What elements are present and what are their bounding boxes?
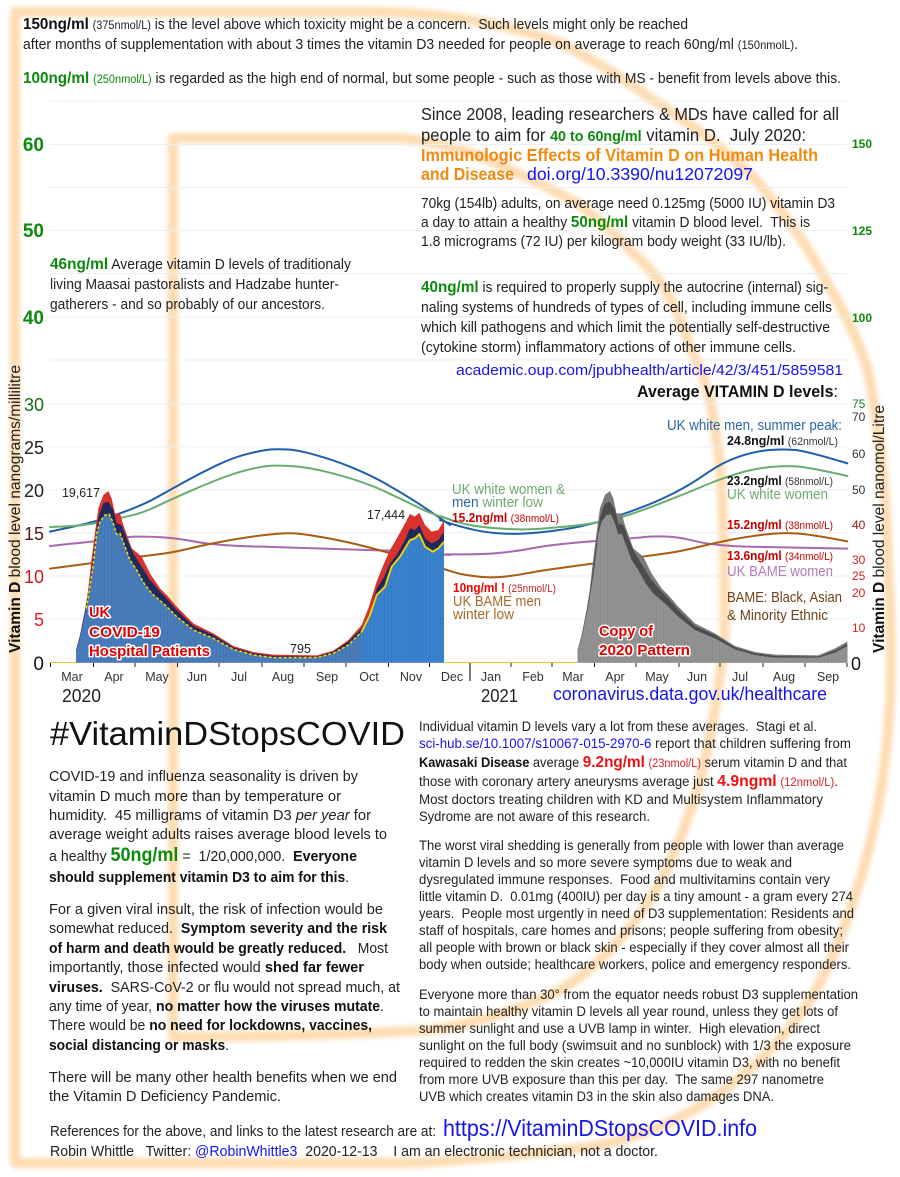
callout: 70kg adults dose: 70kg (154lb) adults, on average need 0.125mg (5000 IU) vitamin D3 [421, 196, 835, 212]
series labels: right side: 15.2ng/ml (38nmol/L) [727, 517, 833, 532]
chart label: Copy of 2020 Pattern [599, 623, 690, 659]
year label 2021: 2021 [481, 686, 518, 706]
footer: references and author [50, 1115, 757, 1160]
month labels: May [145, 670, 170, 684]
series labels: winter lows [452, 482, 565, 623]
callout: 2008 researchers: Since 2008, leading researchers & MDs have called for all [421, 104, 839, 124]
chart label: Copy of 2020 Pattern: Copy of [599, 623, 654, 640]
month labels: Dec [441, 670, 463, 684]
right axis labels: 0 [851, 654, 861, 674]
callout: 70kg adults dose: a day to attain a healthy 50ng/ml vitamin D blood level. This is [421, 214, 810, 231]
text: 150ng/ml line one: 150ng/ml (375nmol/L) is the level above which toxicity might be a concern. Such levels might only be reached [23, 16, 688, 33]
left axis labels: 25 [24, 438, 44, 458]
text block: left column: somewhat reduced. Symptom severity and the risk [49, 920, 388, 937]
month labels [61, 670, 839, 684]
callout: 2008 researchers: doi.org/10.3390/nu12072097 [527, 164, 753, 184]
chart label: UK COVID-19 Hospital Patients: COVID-19 [89, 624, 160, 641]
series labels: winter lows: men winter low [452, 495, 543, 511]
right axis labels: 70 [852, 410, 866, 424]
series labels: winter lows: UK white women & [452, 482, 565, 498]
callout: 40ng/ml autocrine signaling: academic.oup.com/jpubhealth/article/42/3/451/5859581 [456, 363, 843, 379]
right axis labels: 100 [852, 311, 872, 325]
series labels: right side: BAME: Black, Asian [727, 590, 842, 606]
chart label: UK COVID-19 Hospital Patients: Hospital Patients [89, 643, 210, 660]
left axis title: Vitamin D blood level nanograms/millilitre [7, 365, 24, 653]
peak and trough values: 795 [290, 641, 311, 656]
line: yellow edge, first wave [86, 514, 362, 658]
text block: left column: humidity. 45 milligrams of vitamin D3 per year for [49, 807, 371, 824]
callout: 40ng/ml autocrine signaling: (cytokine storm) inflammatory actions of other immune cells. [421, 340, 796, 356]
callout: 46ng/ml Maasai and Hadzabe: gatherers - and so probably of our ancestors. [50, 297, 325, 313]
left axis labels: 40 [23, 308, 44, 329]
curves 2020 [50, 449, 450, 570]
text block: left column: social distancing or masks. [49, 1037, 229, 1054]
month labels: Mar [562, 670, 584, 684]
callout: 46ng/ml Maasai and Hadzabe: living Maasai pastoralists and Hadzabe hunter- [50, 277, 339, 293]
series labels: winter lows: UK BAME men [453, 594, 541, 610]
text block: left column: a healthy 50ng/ml = 1/20,000,000. Everyone [49, 845, 357, 866]
callout: 70kg adults dose: 1.8 micrograms (72 IU) per kilogram body weight (33 IU/lb). [421, 234, 786, 250]
callout: 46ng/ml Maasai and Hadzabe: 46ng/ml Average vitamin D levels of traditionaly [50, 256, 352, 273]
band: light grey [578, 514, 847, 663]
curve: UK BAME men [50, 533, 447, 570]
text block: left column: should supplement vitamin D3 to aim for this. [49, 869, 349, 886]
right axis labels: 150 [852, 137, 872, 151]
callout: 40ng/ml autocrine signaling [420, 279, 843, 379]
text block: right column [419, 719, 858, 1104]
vitamin D level curves [50, 449, 847, 577]
text block: right column: staff of hospitals, care homes and prisons; people suffering from obesity; [419, 923, 843, 938]
callout: 46ng/ml Maasai and Hadzabe [50, 256, 352, 313]
source link: coronavirus.data.gov.uk/healthcare [553, 684, 827, 704]
footer: references and author: https://VitaminDStopsCOVID.info [443, 1115, 757, 1141]
band: outer grey [578, 491, 847, 663]
month labels: Apr [104, 670, 124, 684]
text block: left column: the Vitamin D Deficiency Pandemic. [49, 1088, 281, 1105]
left axis labels [23, 135, 44, 675]
text block: right column: UVB which creates vitamin D3 in the skin also damages DNA. [419, 1089, 774, 1104]
text block: right column: those with coronary artery aneurysms average just 4.9ngml (12nmol/L). [419, 773, 838, 790]
month labels: Sep [817, 670, 839, 684]
text block: right column: to maintain healthy vitamin D levels all year round, unless they get lots of [419, 1004, 838, 1019]
text: 150ng/ml line two: after months of supplementation with about 3 times the vitamin D3 needed for people on average to reach 60ng/ml (150nmolL). [23, 37, 798, 53]
right axis labels: 25 [852, 569, 866, 583]
text block: left column: For a given viral insult, the risk of infection would be [49, 901, 383, 918]
chart label: UK COVID-19 Hospital Patients: UK [89, 604, 110, 621]
callout: 40ng/ml autocrine signaling: naling systems of hundreds of types of cell, including immune cells [421, 300, 832, 316]
right axis title: Vitamin D blood level nanomol/Litre [871, 405, 888, 653]
text block: left column: importantly, those infected would shed far fewer [49, 959, 364, 976]
right axis labels: 10 [852, 621, 866, 635]
right axis labels: 20 [852, 586, 866, 600]
month labels: Mar [61, 670, 83, 684]
text block: right column: summer sunlight and use a UVB lamp in winter. High elevation, direct [419, 1021, 820, 1036]
text block: right column: Everyone more than 30° from the equator needs robust D3 supplementation [419, 987, 858, 1002]
month labels: Aug [272, 670, 294, 684]
text block: right column: years. People most urgently in need of D3 supplementation: Residents and [419, 906, 854, 921]
area chart: grey copy of 2020 pattern [578, 491, 847, 663]
x axis line and ticks [50, 662, 847, 681]
text block: right column: Most doctors treating children with KD and Multisystem Inflammatory [419, 792, 823, 807]
month labels: Sep [316, 670, 338, 684]
text block: right column: from more UVB exposure than this per day. The same 297 nanometre [419, 1072, 824, 1087]
chart gridlines [50, 101, 847, 619]
text block: right column: body when outside; healthcare workers, police and emergency responders. [419, 957, 851, 972]
series labels: right side: UK white men, summer peak: [667, 418, 842, 434]
month labels: May [645, 670, 670, 684]
series labels: right side: 24.8ng/ml (62nmol/L) [727, 433, 838, 448]
peak and trough values [62, 485, 405, 656]
band: dark grey [578, 502, 847, 663]
text: 100ng/ml line: 100ng/ml (250nmol/L) is regarded as the high end of normal, but some people - such as those with MS - benefit from levels above this. [23, 70, 841, 87]
callout: 40ng/ml autocrine signaling: 40ng/ml is required to properly supply the autocrine (internal) sig- [421, 279, 828, 296]
series labels: right side: 23.2ng/ml (58nmol/L) [727, 473, 833, 488]
chart label: UK COVID-19 Hospital Patients [89, 604, 210, 660]
month labels: Jul [732, 670, 748, 684]
series labels: winter lows: winter low [452, 607, 514, 623]
right axis labels: 75 [852, 397, 866, 411]
left axis labels: 15 [24, 524, 44, 544]
callout: 2008 researchers: Immunologic Effects of Vitamin D on Human Health [421, 145, 818, 165]
text block: left column: vitamin D much more than by temperature or [49, 788, 341, 805]
left axis labels: 30 [24, 395, 44, 415]
left axis labels: 10 [24, 567, 44, 587]
month labels: Jan [481, 670, 501, 684]
footer: references and author: Robin Whittle Twitter: @RobinWhittle3 2020-12-13 I am an electronic technician, not a doctor. [50, 1144, 658, 1160]
text block: right column: Individual vitamin D levels vary a lot from these averages. Stagi et al. [419, 719, 817, 734]
text block: right column: Sydrome are not aware of this research. [419, 809, 650, 824]
month labels: Jul [231, 670, 247, 684]
left axis labels: 50 [23, 221, 44, 242]
text block: left column: of harm and death would be greatly reduced. Most [49, 940, 389, 957]
footer: references and author: References for the above, and links to the latest research are at: [50, 1124, 436, 1140]
area chart: UK COVID-19 hospital patients 2020 [76, 491, 444, 663]
left axis labels: 0 [33, 654, 44, 675]
daily bar stripes [578, 514, 847, 663]
series labels: right side: & Minority Ethnic [727, 608, 828, 624]
main title: #VitaminDStopsCOVID [50, 715, 405, 752]
series labels: right side: UK BAME women [727, 564, 833, 580]
callout: 40ng/ml autocrine signaling: which kill pathogens and which limit the potentially self-destructive [420, 320, 830, 336]
year label 2020: 2020 [62, 686, 101, 706]
text block: right column: required to redden the skin creates ~10,000IU vitamin D3, with no benefit [419, 1055, 840, 1070]
series labels: right side [667, 418, 842, 624]
series labels: winter lows: 10ng/ml ! (25nmol/L) [453, 580, 556, 595]
right axis labels: 125 [852, 224, 872, 238]
text block: right column: little vitamin D. 0.01mg (400IU) per day is a tiny amount - a gram every 274 [419, 889, 854, 904]
top text: 150 and 100 ng/ml notes [23, 16, 841, 87]
month labels: Apr [605, 670, 625, 684]
series labels: right side: UK white women [727, 487, 828, 503]
band: in hospital (navy) [76, 502, 444, 663]
chart heading: Average VITAMIN D levels: Average VITAMIN D levels: [637, 382, 838, 401]
callout: 2008 researchers: people to aim for 40 to 60ng/ml vitamin D. July 2020: [421, 125, 806, 145]
callout: 2008 researchers [421, 104, 839, 184]
callout: 70kg adults dose [421, 196, 835, 250]
text block: right column: sci-hub.se/10.1007/s10067-015-2970-6 report that children suffering from [419, 736, 851, 751]
callout: 2008 researchers: and Disease [421, 164, 514, 184]
text block: right column: Kawasaki Disease average 9.2ng/ml (23nmol/L) serum vitamin D and that [419, 754, 847, 771]
series labels: right side: 13.6ng/ml (34nmol/L) [727, 548, 833, 563]
left axis labels: 60 [23, 135, 44, 156]
peak and trough values: 17,444 [367, 507, 405, 522]
text block: left column: There will be many other health benefits when we end [49, 1069, 397, 1086]
month labels: Jun [687, 670, 707, 684]
text block: left column: viruses. SARS-CoV-2 or flu would not spread much, at [49, 979, 401, 996]
text block: left column: There would be no need for lockdowns, vaccines, [49, 1017, 372, 1034]
text block: right column: The worst viral shedding is generally from people with lower than average [419, 838, 844, 853]
month labels: Jun [187, 670, 207, 684]
right axis labels: 40 [852, 518, 866, 532]
right axis labels: 60 [852, 447, 866, 461]
curves 2021 [440, 449, 847, 577]
band: ventilated (red) [76, 491, 444, 663]
curve: UK BAME women [50, 537, 450, 555]
text block: right column: dysregulated immune responses. Food and multivitamins contain very [419, 872, 830, 887]
line: yellow edge, second wave [362, 534, 444, 632]
right axis labels: 50 [852, 483, 866, 497]
peak and trough values: 19,617 [62, 485, 100, 500]
text block: right column: all people with brown or black skin - especially if they cover almost all their [419, 940, 850, 955]
text block: left column [49, 768, 401, 1105]
month labels: Oct [359, 670, 379, 684]
text block: right column: vitamin D levels and so more severe symptoms due to weak and [419, 855, 792, 870]
month labels: Nov [400, 670, 423, 684]
text block: left column: any time of year, no matter how the viruses mutate. [49, 998, 384, 1015]
left axis labels: 5 [34, 610, 44, 630]
right axis labels: 30 [852, 553, 866, 567]
series labels: winter lows: 15.2ng/ml (38nmol/L) [452, 510, 559, 525]
band: patients (blue) [76, 514, 444, 663]
curve: UK white women [50, 466, 450, 527]
text block: right column: sunlight on the full body (swimsuit and no sunblock) with 1/3 the exposure [419, 1038, 851, 1053]
curve: UK white men [50, 449, 450, 532]
right axis labels [851, 137, 872, 674]
text block: left column: COVID-19 and influenza seasonality is driven by [49, 768, 358, 785]
left axis labels: 20 [24, 481, 44, 501]
daily bar stripes [76, 514, 444, 663]
chart label: Copy of 2020 Pattern: 2020 Pattern [599, 642, 690, 659]
month labels: Feb [522, 670, 544, 684]
month labels: Aug [773, 670, 795, 684]
text block: left column: average weight adults raises average blood levels to [49, 826, 387, 843]
